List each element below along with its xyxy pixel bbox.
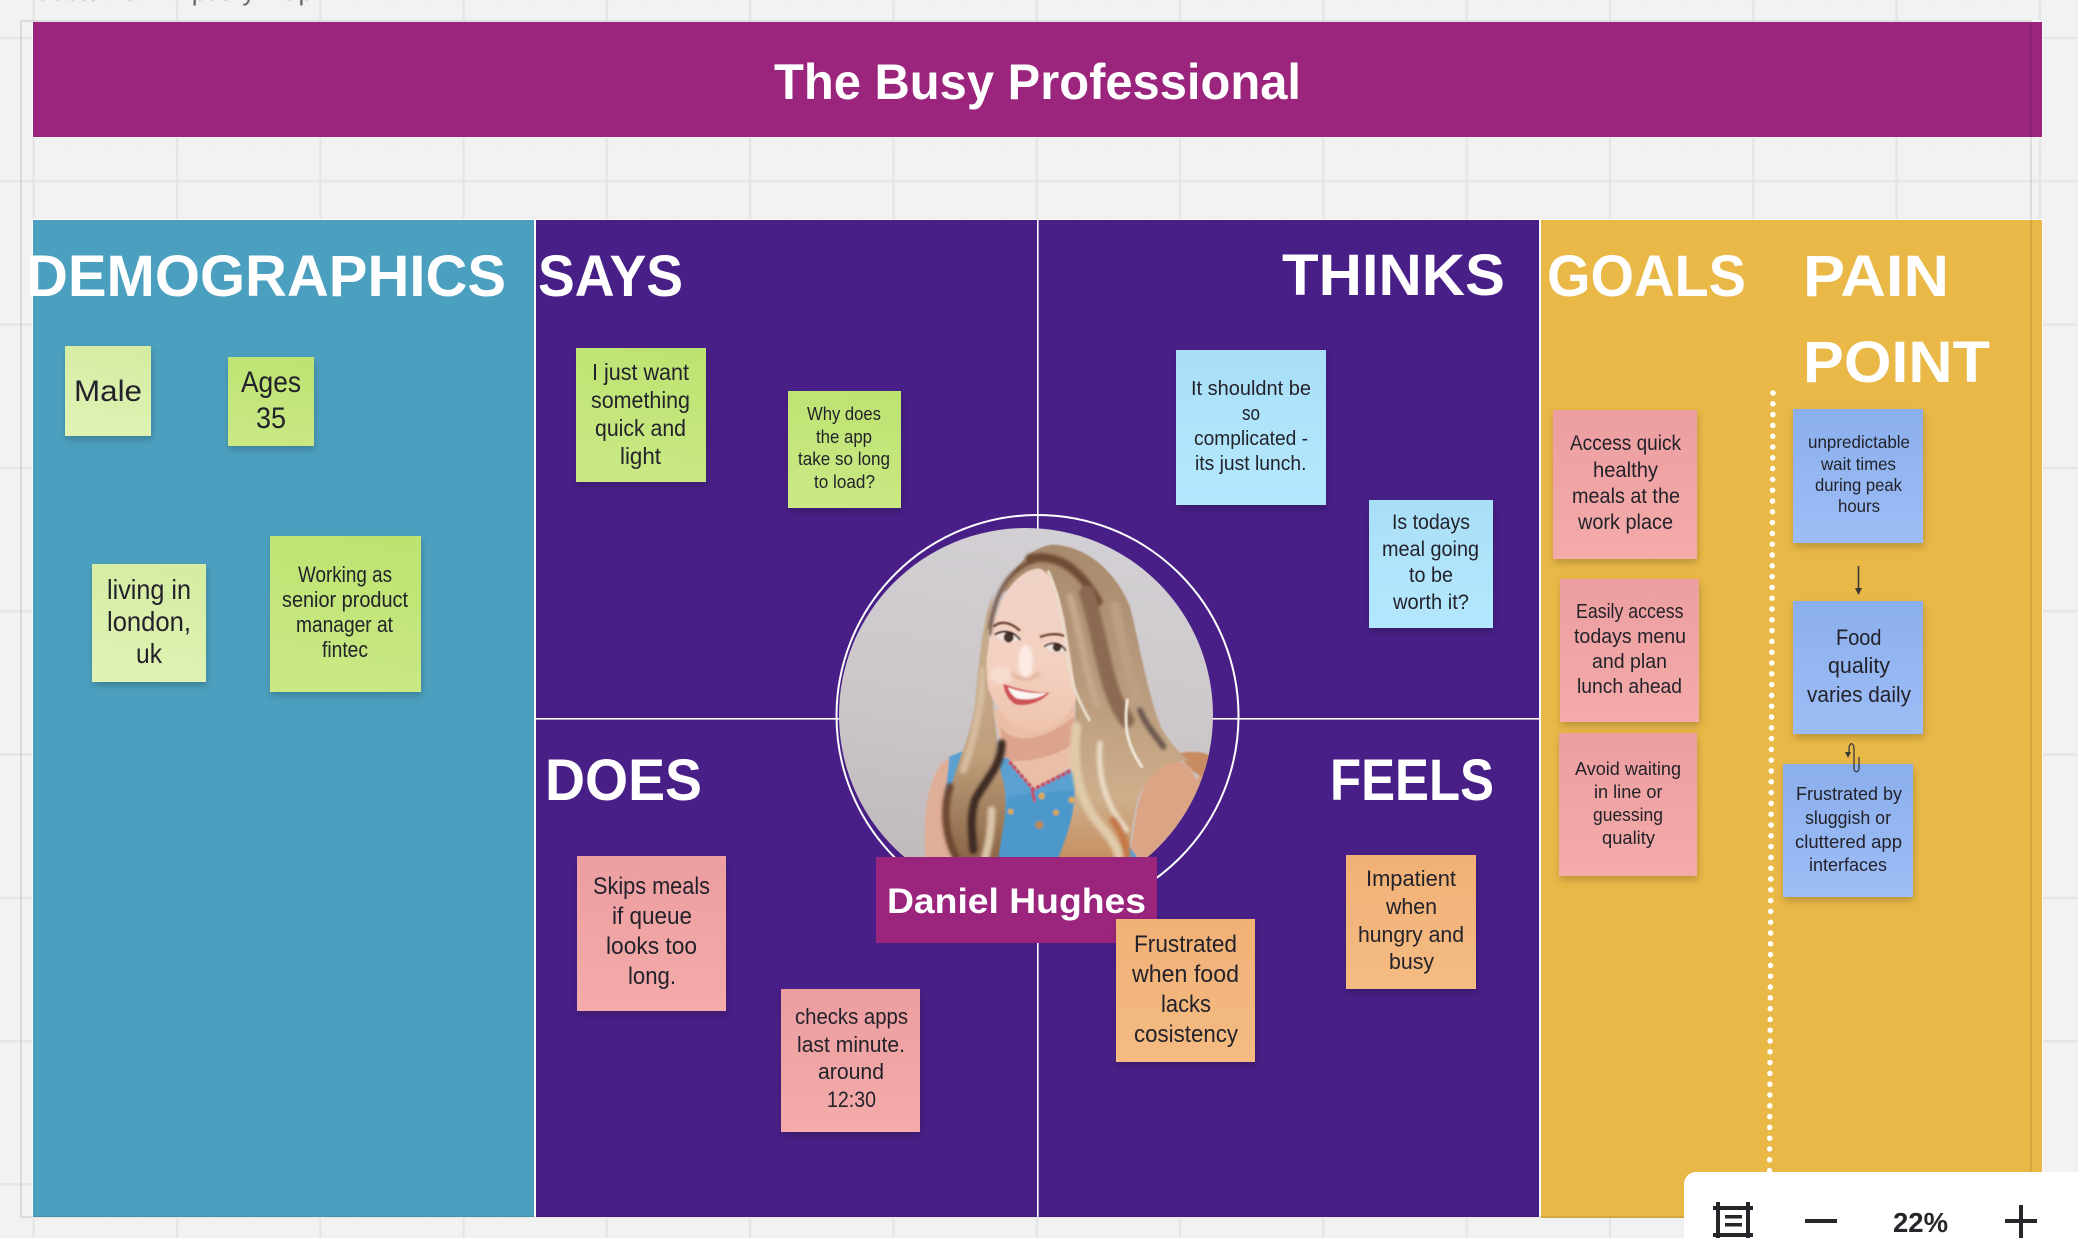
sticky: job: senior product bbox=[282, 587, 408, 612]
sticky: impatient: Impatient bbox=[1366, 866, 1457, 891]
name plate bbox=[876, 857, 1157, 943]
sticky: location: london, bbox=[107, 606, 191, 637]
icon: zoom out bbox=[1805, 1219, 1837, 1223]
sticky: complicated bbox=[1176, 350, 1326, 505]
icon: zoom in bbox=[2005, 1205, 2037, 1238]
sticky: food quality: Food bbox=[1836, 625, 1882, 650]
sticky: skips meals: Skips meals bbox=[593, 873, 710, 900]
sticky: job bbox=[270, 536, 421, 692]
face bbox=[986, 568, 1076, 732]
heading: demographics: DEMOGRAPHICS bbox=[26, 244, 506, 309]
sticky: food quality: quality bbox=[1828, 653, 1890, 678]
sticky: male bbox=[65, 346, 151, 436]
heading: thinks: THINKS bbox=[1282, 243, 1505, 308]
sticky: impatient: busy bbox=[1389, 949, 1435, 974]
sticky: wait times: during peak bbox=[1815, 475, 1902, 495]
sticky: age: 35 bbox=[256, 402, 286, 435]
sticky: frustrated: cosistency bbox=[1134, 1021, 1238, 1048]
sticky: quick and light: light bbox=[620, 443, 662, 469]
heading: pain point: POINT bbox=[1803, 330, 1990, 395]
panel: feels bbox=[1116, 748, 1494, 1062]
title banner bbox=[33, 22, 2042, 137]
sticky: worth it: to be bbox=[1409, 563, 1453, 587]
sticky: age bbox=[228, 357, 314, 446]
sticky: quick and light bbox=[576, 348, 706, 482]
sticky: avoid waiting: in line or bbox=[1594, 781, 1662, 802]
sticky: worth it bbox=[1369, 500, 1493, 628]
sticky: checks apps bbox=[781, 989, 920, 1132]
sticky: impatient: when bbox=[1385, 894, 1437, 919]
dotted divider bbox=[1770, 393, 1773, 1172]
sticky: frustrated bbox=[1116, 919, 1255, 1062]
ring around portrait bbox=[836, 515, 1238, 917]
sticky: sluggish app bbox=[1783, 764, 1913, 897]
sticky: app load: Why does bbox=[807, 403, 881, 424]
hair strands bbox=[946, 557, 1163, 858]
panel: demographics bbox=[26, 220, 534, 1217]
persona: portrait and name bbox=[836, 515, 1238, 943]
hair mass right bbox=[1002, 545, 1189, 860]
sticky: today's menu: and plan bbox=[1592, 650, 1667, 673]
sticky: age: Ages bbox=[241, 366, 301, 399]
sticky: app load: take so long bbox=[798, 448, 890, 469]
sticky: sluggish app: cluttered app bbox=[1795, 831, 1902, 852]
sticky: access meals: healthy bbox=[1593, 458, 1658, 482]
sticky: worth it: meal going bbox=[1382, 537, 1479, 561]
sticky: app load: the app bbox=[816, 426, 872, 447]
arrow: curved connector bbox=[1845, 744, 1859, 772]
sticky: food quality: varies daily bbox=[1807, 682, 1911, 707]
panel: empathy quadrants background bbox=[536, 220, 1539, 1217]
sticky: checks apps: around bbox=[818, 1059, 884, 1084]
sticky: male: Male bbox=[74, 375, 142, 408]
sticky: complicated: its just lunch. bbox=[1195, 452, 1306, 475]
sticky: job: Working as bbox=[298, 562, 392, 587]
sticky: wait times: hours bbox=[1838, 496, 1880, 516]
sticky: skips meals: if queue bbox=[612, 903, 692, 930]
sticky: sluggish app: sluggish or bbox=[1805, 807, 1891, 828]
panel: says bbox=[538, 244, 901, 508]
heading: goals: GOALS bbox=[1547, 244, 1746, 309]
sticky: worth it: worth it? bbox=[1392, 590, 1469, 614]
sticky: complicated: complicated - bbox=[1194, 427, 1308, 450]
title text: The Busy Professional bbox=[774, 54, 1301, 110]
hair mass left bbox=[946, 593, 1006, 860]
arrow: wait times to food quality bbox=[1855, 566, 1862, 595]
panel: goals and pain points bbox=[1541, 220, 2042, 1218]
sticky: frustrated: lacks bbox=[1161, 991, 1211, 1018]
sticky: app load bbox=[788, 391, 901, 508]
sticky: access meals: meals at the bbox=[1572, 484, 1680, 508]
sticky: quick and light: I just want bbox=[592, 359, 690, 385]
sticky: location: living in bbox=[107, 574, 191, 605]
sticky: checks apps: 12:30 bbox=[827, 1087, 876, 1112]
sticky: skips meals: looks too bbox=[606, 933, 697, 960]
sticky: wait times: wait times bbox=[1820, 454, 1896, 474]
sticky: quick and light: something bbox=[591, 387, 690, 413]
toolbar: zoom controls bbox=[1684, 1172, 2078, 1238]
sticky: avoid waiting: guessing bbox=[1593, 804, 1663, 825]
panel: does bbox=[545, 748, 920, 1132]
sticky: job: fintec bbox=[322, 637, 368, 662]
sticky: location bbox=[92, 564, 206, 682]
sticky: skips meals bbox=[577, 856, 726, 1011]
sticky: skips meals: long. bbox=[628, 963, 676, 990]
sticky: worth it: Is todays bbox=[1392, 510, 1470, 534]
sticky: access meals: work place bbox=[1577, 510, 1673, 534]
eyes, brows, nose, mouth bbox=[993, 623, 1066, 652]
sticky: quick and light: quick and bbox=[595, 415, 686, 441]
photo: smiling woman with long blonde hair bbox=[837, 527, 1217, 860]
heading: does: DOES bbox=[545, 748, 702, 813]
sticky: complicated: It shouldnt be bbox=[1191, 377, 1311, 400]
sticky: today's menu: Easily access bbox=[1576, 600, 1684, 623]
sticky: sluggish app: interfaces bbox=[1809, 854, 1887, 875]
sticky: food quality bbox=[1793, 601, 1923, 734]
sticky: today's menu bbox=[1560, 579, 1699, 722]
sticky: wait times bbox=[1793, 409, 1923, 543]
sticky: app load: to load? bbox=[814, 471, 875, 492]
sticky: checks apps: checks apps bbox=[795, 1004, 908, 1029]
name plate: Daniel Hughes bbox=[887, 882, 1146, 921]
sticky: location: uk bbox=[136, 638, 163, 669]
sticky: job: manager at bbox=[296, 612, 393, 637]
sticky: avoid waiting bbox=[1559, 733, 1697, 876]
icon: fit to frame bbox=[1713, 1202, 1753, 1238]
sticky: access meals bbox=[1553, 410, 1697, 559]
sticky: today's menu: lunch ahead bbox=[1577, 675, 1682, 698]
heading: pain point bbox=[1803, 244, 1990, 395]
panel: thinks bbox=[1176, 243, 1505, 628]
sticky: avoid waiting: quality bbox=[1602, 827, 1656, 848]
zoom percentage: 22% bbox=[1893, 1207, 1948, 1238]
sticky: sluggish app: Frustrated by bbox=[1796, 783, 1903, 804]
sticky: frustrated: Frustrated bbox=[1134, 931, 1237, 958]
heading: says: SAYS bbox=[538, 244, 683, 309]
sticky: avoid waiting: Avoid waiting bbox=[1575, 758, 1681, 779]
sticky: wait times: unpredictable bbox=[1808, 432, 1910, 452]
sticky: impatient bbox=[1346, 855, 1476, 989]
heading: pain point: PAIN bbox=[1803, 244, 1949, 309]
sticky: complicated: so bbox=[1242, 402, 1260, 425]
heading: feels: FEELS bbox=[1330, 748, 1494, 813]
sticky: frustrated: when food bbox=[1131, 961, 1239, 988]
sticky: access meals: Access quick bbox=[1570, 431, 1681, 455]
sticky: checks apps: last minute. bbox=[797, 1032, 905, 1057]
sticky: today's menu: todays menu bbox=[1574, 625, 1686, 648]
sticky: impatient: hungry and bbox=[1358, 922, 1464, 947]
